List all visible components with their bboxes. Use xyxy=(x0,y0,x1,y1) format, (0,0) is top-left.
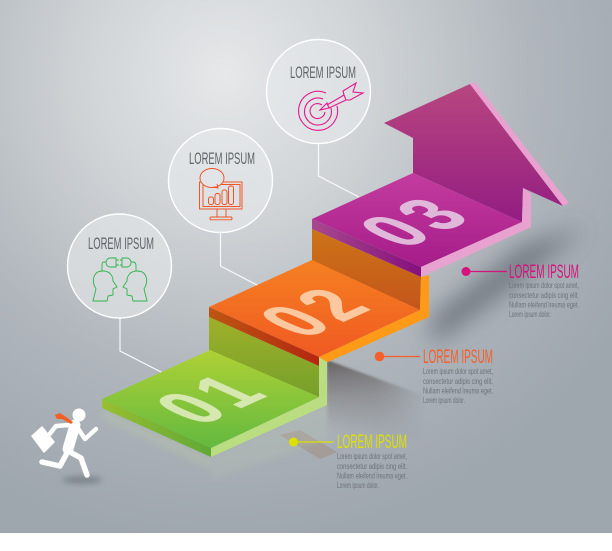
label 2 body: Nullam eleifend lreuma eget. xyxy=(423,386,493,396)
circle 3 heading: LOREM IPSUM xyxy=(290,63,356,82)
step 2 orange xyxy=(209,229,429,366)
number 02: 02 xyxy=(240,277,395,347)
circle 1: plugs and heads xyxy=(68,214,172,318)
circle 1 heading: LOREM IPSUM xyxy=(88,234,154,253)
label 2 xyxy=(375,347,493,405)
label 2 body: Lorem ipsum dolor. xyxy=(423,395,465,405)
number 03: 03 xyxy=(340,187,495,257)
icon: monitor with chart and speech bubble xyxy=(200,168,242,220)
label 1 body: consectetur adipis cing elit. xyxy=(337,461,407,471)
connector lines xyxy=(120,144,359,373)
label 3 body xyxy=(509,280,579,319)
step 3 purple xyxy=(312,173,531,277)
label 2 body: Lorem ipsum dolor spot amet, xyxy=(423,366,493,376)
circle 2 heading: LOREM IPSUM xyxy=(189,149,255,168)
label 1 heading: LOREM IPSUM xyxy=(337,432,407,453)
icon: target with arrow xyxy=(299,83,363,130)
label 1 body: Lorem ipsum dolor spot amet, xyxy=(337,451,407,461)
label 2 heading: LOREM IPSUM xyxy=(423,347,493,368)
label 3 xyxy=(462,262,579,319)
label 2 body: consectetur adipis cing elit. xyxy=(423,376,493,386)
number 01: 01 xyxy=(136,364,291,434)
label 3 body: Lorem ipsum dolor. xyxy=(509,309,551,319)
icon: two heads with plug xyxy=(93,258,147,301)
arrow head xyxy=(384,82,569,222)
label 2 body xyxy=(423,366,493,405)
label 1 xyxy=(289,432,407,490)
label 1 body: Nullam eleifend lreuma eget. xyxy=(337,470,407,480)
icon: running businessman xyxy=(32,408,102,484)
label 1 body: Lorem ipsum dolor. xyxy=(337,480,379,490)
step 1 green xyxy=(102,317,327,457)
circle 2: monitor xyxy=(168,128,272,232)
label 1 body xyxy=(337,451,407,490)
cast shadows xyxy=(102,228,585,480)
label 3 body: consectetur adipis cing elit. xyxy=(509,290,579,300)
circle 3: target xyxy=(266,40,370,144)
